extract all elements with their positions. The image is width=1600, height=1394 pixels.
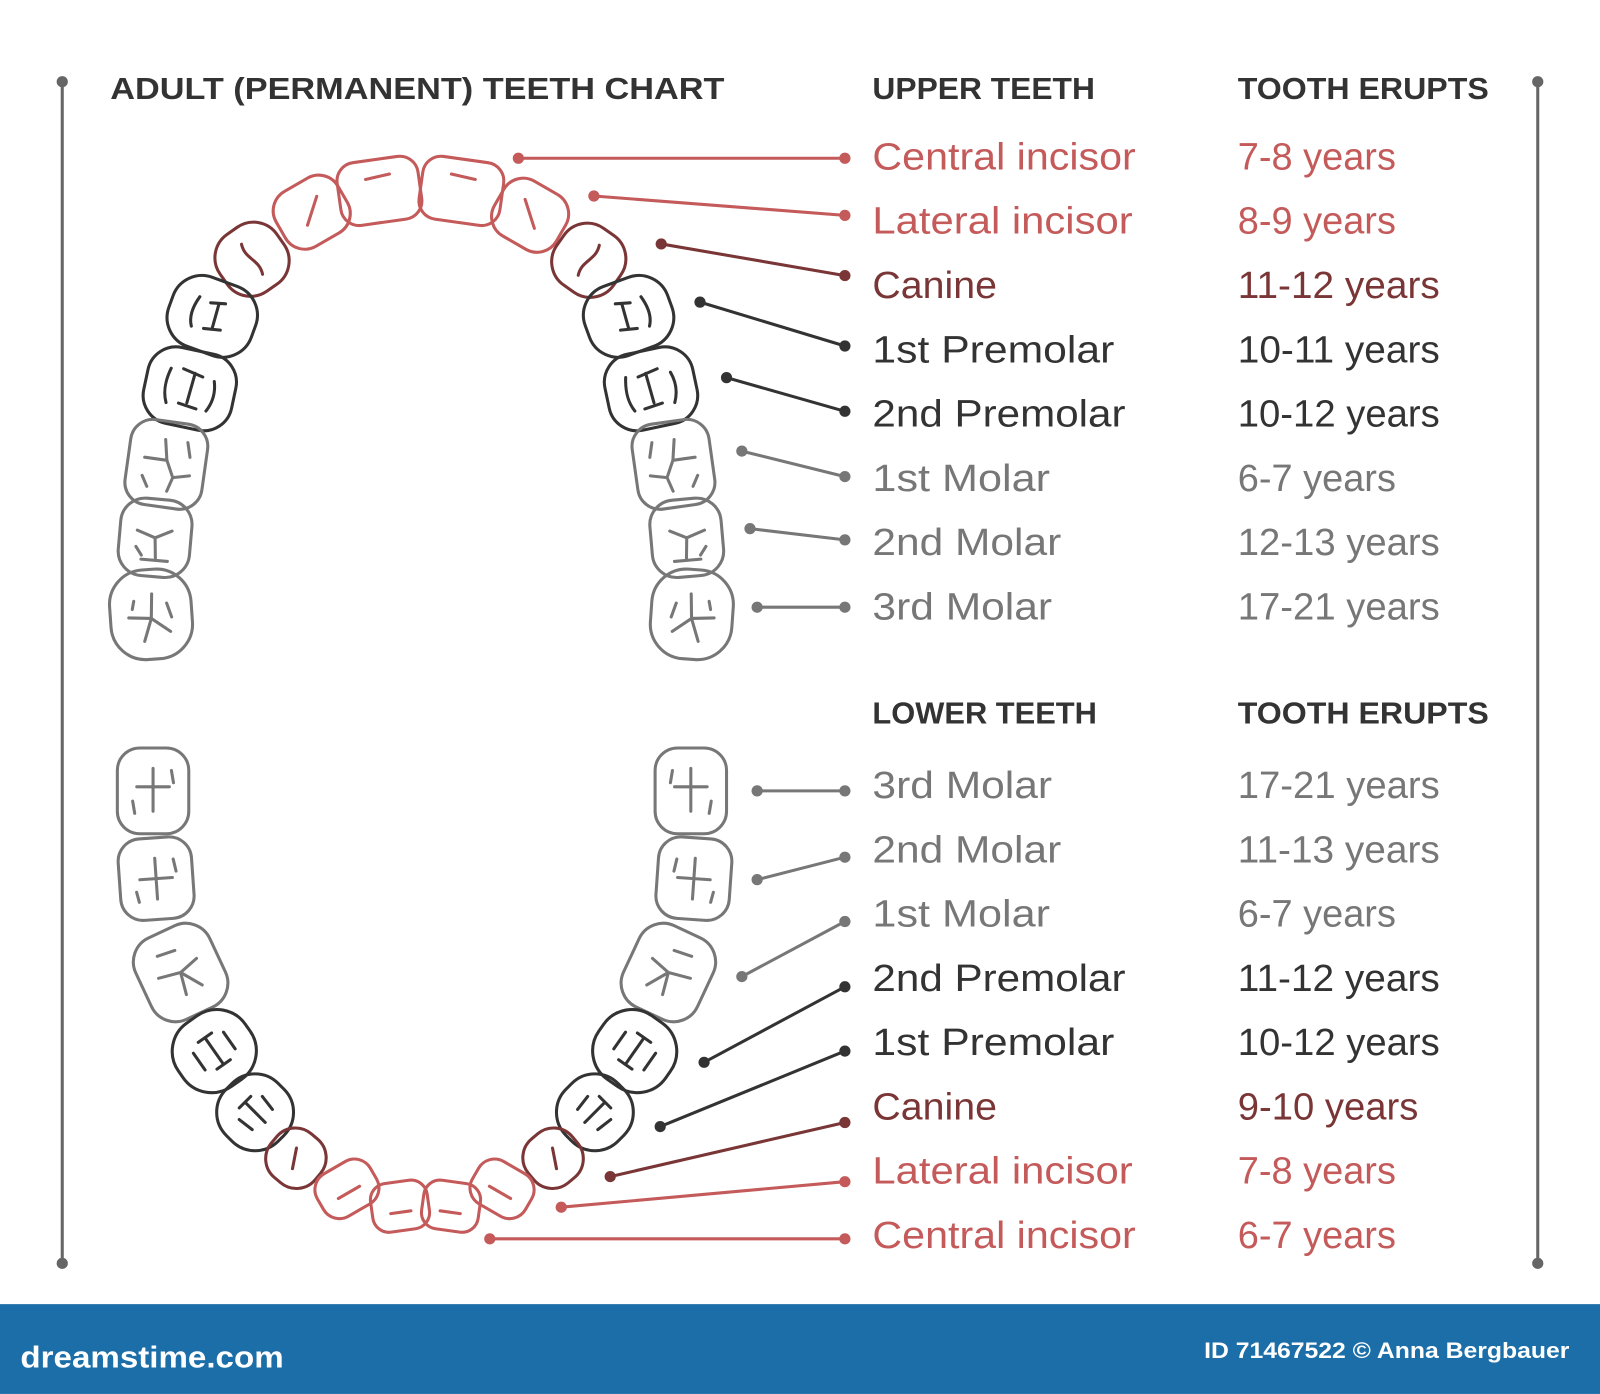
upper erupt years — [1238, 135, 1440, 627]
lower erupt years: 7-8 years — [1238, 1150, 1396, 1192]
lower arch teeth — [117, 748, 733, 1234]
lower erupt years: 6-7 years — [1238, 893, 1396, 935]
lower erupt years: 17-21 years — [1238, 764, 1440, 806]
lower erupt years — [1238, 764, 1440, 1256]
upper teeth names: 2nd Premolar — [872, 393, 1126, 435]
lower teeth names: 2nd Molar — [872, 828, 1061, 870]
upper teeth names: 3rd Molar — [872, 585, 1052, 627]
heading: lower teeth: LOWER TEETH — [872, 697, 1097, 731]
lower erupt years: 6-7 years — [1238, 1214, 1396, 1256]
frame: left bracket line — [58, 78, 66, 1267]
lower erupt years: 11-13 years — [1238, 828, 1440, 870]
lower teeth names: Lateral incisor — [872, 1150, 1133, 1192]
upper erupt years: 12-13 years — [1238, 521, 1440, 563]
upper erupt years: 17-21 years — [1238, 585, 1440, 627]
upper teeth names: Central incisor — [872, 135, 1136, 177]
lower teeth names: 1st Premolar — [872, 1021, 1114, 1063]
lower teeth names: 2nd Premolar — [872, 957, 1126, 999]
lower teeth names: 1st Molar — [872, 893, 1050, 935]
leader lines lower — [486, 787, 849, 1243]
upper erupt years: 11-12 years — [1238, 264, 1440, 306]
lower erupt years: 9-10 years — [1238, 1085, 1418, 1127]
footer bar: dreamstime.com — [20, 1340, 284, 1374]
title: ADULT (PERMANENT) TEETH CHART — [110, 72, 725, 106]
lower teeth names: Canine — [872, 1085, 997, 1127]
lower teeth names: 3rd Molar — [872, 764, 1052, 806]
heading: tooth erupts lower: TOOTH ERUPTS — [1238, 697, 1489, 731]
upper teeth names: Lateral incisor — [872, 200, 1133, 242]
upper arch teeth — [107, 154, 736, 662]
footer bar — [0, 1304, 1600, 1394]
upper teeth names: 2nd Molar — [872, 521, 1061, 563]
upper erupt years: 8-9 years — [1238, 200, 1396, 242]
upper teeth names: 1st Molar — [872, 457, 1050, 499]
heading: upper teeth: UPPER TEETH — [872, 72, 1095, 106]
upper erupt years: 7-8 years — [1238, 135, 1396, 177]
upper teeth names — [872, 135, 1136, 627]
upper erupt years: 10-12 years — [1238, 393, 1440, 435]
lower erupt years: 10-12 years — [1238, 1021, 1440, 1063]
upper erupt years: 10-11 years — [1238, 328, 1440, 370]
lower erupt years: 11-12 years — [1238, 957, 1440, 999]
lower teeth names — [872, 764, 1136, 1256]
upper teeth names: Canine — [872, 264, 997, 306]
heading: tooth erupts upper: TOOTH ERUPTS — [1238, 72, 1489, 106]
upper erupt years: 6-7 years — [1238, 457, 1396, 499]
lower teeth names: Central incisor — [872, 1214, 1136, 1256]
frame: right bracket line — [1534, 78, 1542, 1267]
footer bar: ID 71467522 © Anna Bergbauer — [1204, 1338, 1570, 1363]
upper teeth names: 1st Premolar — [872, 328, 1114, 370]
leader lines upper — [514, 154, 849, 611]
